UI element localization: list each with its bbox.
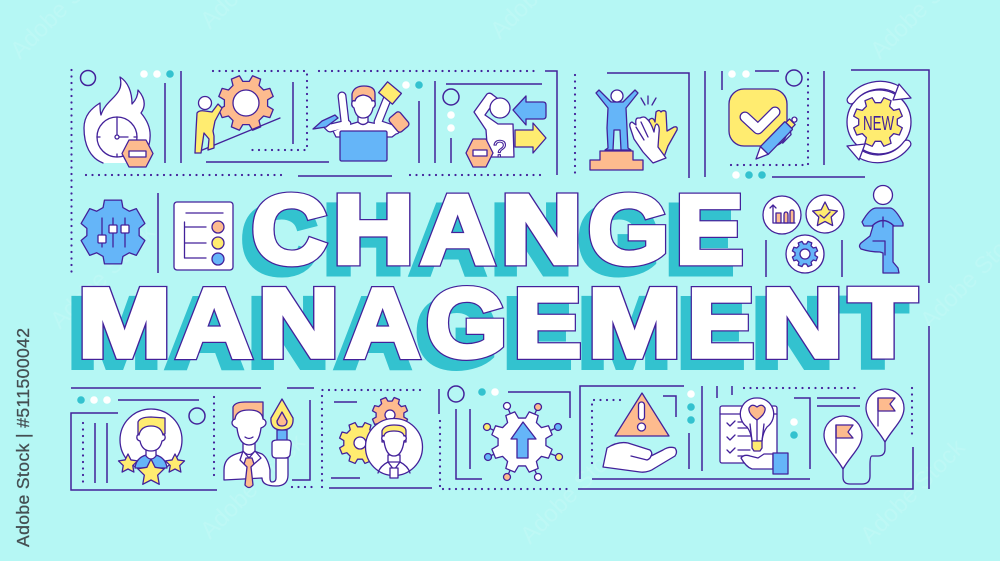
icon: leader holding torch — [224, 399, 293, 488]
text: Adobe Stock — [195, 428, 311, 544]
title: Change Management: E — [688, 268, 754, 378]
icon: check mark and pen — [729, 89, 802, 165]
title: Change Management: E — [514, 268, 581, 378]
title: Change Management: A — [420, 175, 495, 284]
icon: employee with star rating — [118, 409, 185, 484]
title: Change Management: A — [166, 278, 242, 388]
title: Change Management: M — [588, 268, 681, 378]
icon: balancing yoga figure — [860, 186, 903, 273]
icon: person pushing gear uphill — [195, 67, 282, 153]
icon: gears and employee portrait — [333, 392, 422, 478]
title: Change Management: G — [426, 268, 507, 378]
title: Change Management: E — [676, 175, 743, 284]
title: Change Management: N — [258, 268, 339, 378]
icon: confused person with direction arrows: ? — [493, 136, 506, 163]
title: Change Management: N — [248, 278, 329, 388]
title: Change Management: M — [78, 268, 171, 378]
icon: winner on podium with high five — [590, 90, 677, 170]
title: Change Management: C — [252, 175, 327, 284]
title: Change Management: N — [762, 268, 843, 378]
title: Change Management: A — [176, 268, 252, 378]
text: Adobe Stock — [515, 433, 631, 549]
icon: new gear with cycle arrows: NEW — [863, 113, 894, 135]
icon: confused person with direction arrows — [466, 93, 546, 167]
title: Change Management: A — [410, 185, 485, 294]
stock id caption: Adobe Stock | #511500042 — [13, 328, 33, 547]
icon: ideas checklist with light bulb in hand — [720, 398, 788, 474]
title: Change Management: A — [336, 278, 410, 388]
title: Change Management: M — [588, 268, 681, 378]
title: Change Management: N — [501, 175, 582, 284]
title: Change Management: H — [333, 175, 414, 284]
title: Change Management: C — [242, 185, 317, 294]
title: Change Management: T — [839, 278, 907, 388]
icon: route between two map pins — [824, 389, 904, 484]
icon: gear with network nodes and up arrow — [482, 402, 562, 482]
title: Change Management: G — [588, 175, 669, 284]
title: Change Management: C — [252, 175, 327, 284]
title: Change Management: A — [176, 268, 252, 378]
title: Change Management: G — [588, 175, 669, 284]
title: Change Management: A — [346, 268, 420, 378]
title: Change Management: M — [578, 278, 671, 388]
icon: three badges with chart, star and gear — [763, 195, 844, 273]
title: Change Management: N — [752, 278, 833, 388]
title: Change Management: A — [420, 175, 495, 284]
icon: warning sign over open hand — [603, 393, 676, 472]
text: Adobe Stock — [45, 218, 161, 334]
title: Change Management: E — [666, 185, 733, 294]
title: Change Management: N — [501, 175, 582, 284]
title: Change Management: N — [762, 268, 843, 378]
title: Change Management: T — [849, 268, 917, 378]
title: Change Management: E — [688, 268, 754, 378]
icon: checklist panel — [174, 202, 233, 270]
title: Change Management: G — [416, 278, 497, 388]
title: Change Management: N — [491, 185, 572, 294]
title: Change Management: G — [426, 268, 507, 378]
title: Change Management — [68, 175, 917, 388]
title: Change Management: M — [78, 268, 171, 378]
title: Change Management: E — [676, 175, 743, 284]
title: Change Management: A — [346, 268, 420, 378]
title: Change Management: G — [578, 185, 659, 294]
decorative frame lines and dots — [71, 70, 929, 490]
icon: settings gear with sliders — [81, 200, 145, 264]
icon: flame and clock — [84, 77, 153, 167]
icon: new gear with cycle arrows — [846, 84, 911, 160]
title: Change Management: T — [849, 268, 917, 378]
text: Adobe Stock — [855, 433, 971, 549]
icon: multitasking worker — [313, 82, 410, 161]
title: Change Management: E — [514, 268, 581, 378]
title: Change Management: E — [504, 278, 571, 388]
title: Change Management: M — [68, 278, 161, 388]
title: Change Management: H — [333, 175, 414, 284]
title: Change Management: N — [258, 268, 339, 378]
title: Change Management: E — [678, 278, 744, 388]
title: Change Management: H — [323, 185, 404, 294]
